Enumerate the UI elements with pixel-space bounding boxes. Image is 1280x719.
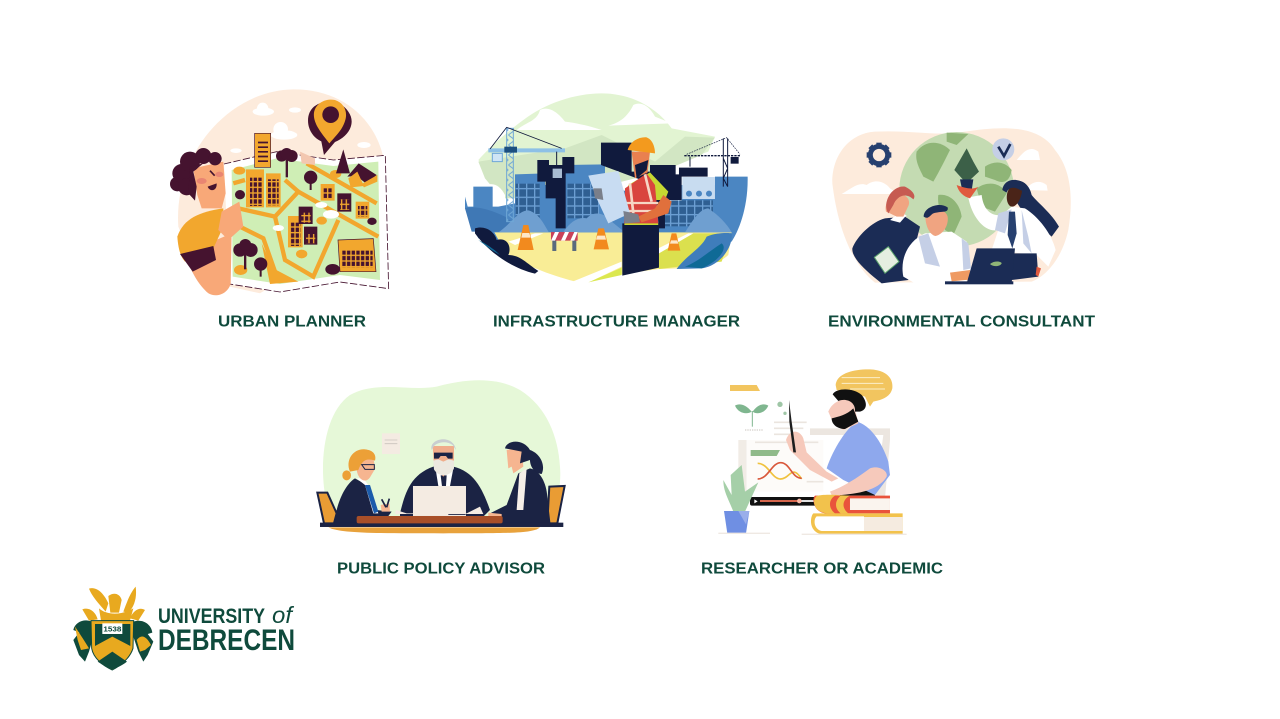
woman right xyxy=(488,442,551,525)
person xyxy=(170,148,243,295)
traffic cones xyxy=(518,225,680,251)
map sheet xyxy=(224,152,389,292)
ground xyxy=(494,232,732,282)
label: researcher or academic: RESEARCHER OR ACADEMIC xyxy=(701,560,943,578)
laptop xyxy=(395,486,483,516)
crane left xyxy=(488,128,565,222)
globe xyxy=(899,132,1014,247)
white cloud puffs on map xyxy=(273,202,339,231)
label: public policy advisor: PUBLIC POLICY ADVISOR xyxy=(337,560,545,578)
wordmark: UNIVERSITY xyxy=(158,605,265,628)
illustration: urban planner xyxy=(170,89,389,295)
video player bar xyxy=(750,497,822,506)
label: infrastructure manager: INFRASTRUCTURE MANAGER xyxy=(493,314,740,330)
dark buildings xyxy=(537,157,574,228)
presenter xyxy=(786,389,890,496)
plant in pot xyxy=(723,465,758,533)
buildings xyxy=(246,133,377,272)
illustration: infrastructure manager xyxy=(465,93,748,283)
dna helix xyxy=(758,463,802,479)
logo: University of Debrecen: of xyxy=(272,602,295,628)
crest: 1538 xyxy=(103,625,121,634)
illustration: public policy advisor xyxy=(317,380,565,533)
speech bubble xyxy=(836,369,892,407)
icon: location pin xyxy=(308,100,352,155)
book stack xyxy=(811,495,903,534)
icon: check badge xyxy=(992,138,1014,160)
woman with tie xyxy=(957,180,1059,280)
icon: gear xyxy=(867,143,891,167)
screen xyxy=(738,422,890,498)
man centre xyxy=(400,439,490,517)
city silhouette xyxy=(465,164,748,245)
right chair xyxy=(547,486,565,523)
left chair xyxy=(317,493,337,523)
table xyxy=(320,516,563,533)
logo: University of Debrecen xyxy=(73,587,295,670)
man in centre xyxy=(902,205,972,283)
speech note xyxy=(382,433,400,454)
trees xyxy=(276,148,298,177)
woman with clipboard xyxy=(852,187,920,283)
road barrier xyxy=(551,232,578,251)
crane right xyxy=(684,138,740,187)
label: urban planner: URBAN PLANNER xyxy=(218,314,366,330)
illustration: environmental consultant xyxy=(832,128,1071,284)
plant card xyxy=(730,385,774,439)
worker xyxy=(588,137,672,276)
crest xyxy=(73,587,153,670)
potted plant xyxy=(954,148,979,191)
woman left xyxy=(334,449,392,525)
label: environmental consultant: ENVIRONMENTAL CONSULTANT xyxy=(828,314,1096,330)
logo: University of Debrecen: DEBRECEN xyxy=(158,624,295,657)
laptop xyxy=(945,248,1015,284)
illustration: researcher or academic xyxy=(718,369,907,534)
